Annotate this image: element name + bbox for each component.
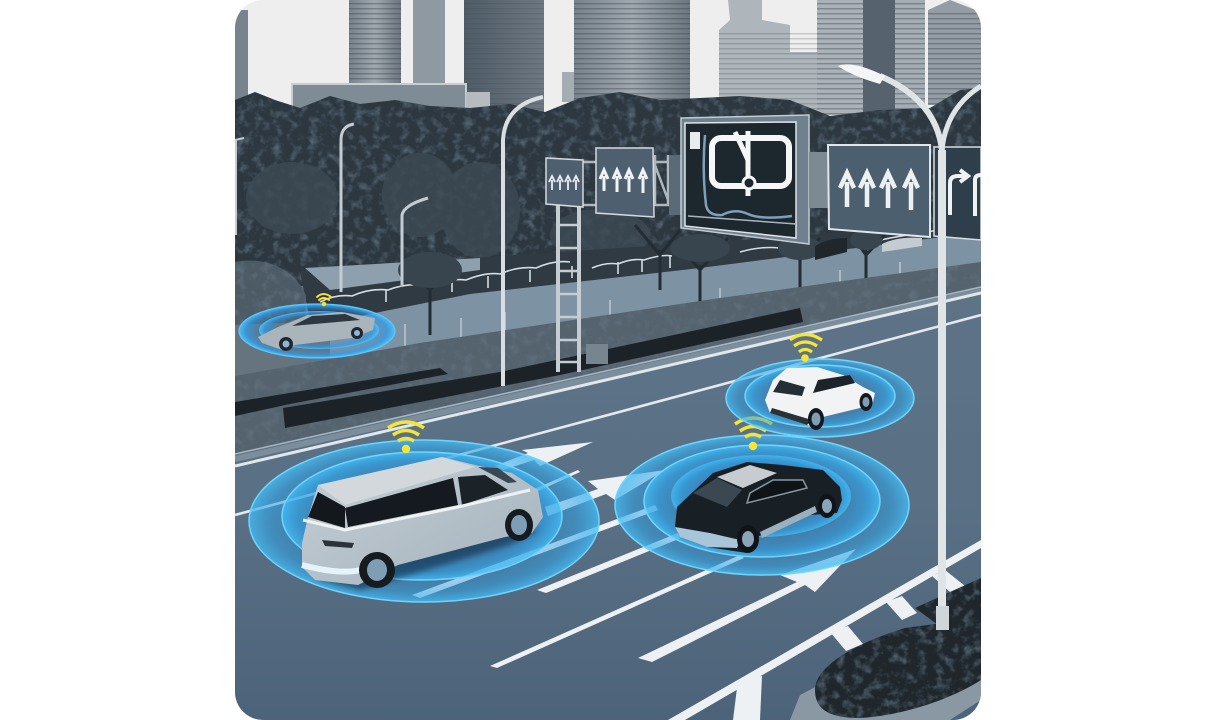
tall street lamp — [838, 64, 981, 630]
wifi icon — [317, 294, 331, 306]
wifi icon — [388, 422, 424, 453]
hedge rows — [235, 308, 803, 428]
large gantry sign: route diagram — [681, 115, 828, 244]
verge — [235, 262, 981, 456]
wifi icon — [790, 334, 822, 362]
sign: four arrows medium — [596, 148, 683, 217]
foreground trees — [246, 153, 650, 261]
wifi icon — [735, 418, 772, 450]
roadside fence posts — [404, 262, 901, 346]
main road surface — [235, 286, 981, 720]
car shadow — [315, 530, 540, 590]
MPV with signal rings — [249, 422, 599, 602]
ground base behind the road — [235, 262, 981, 376]
far car with signal rings — [239, 294, 395, 358]
white SUV with signal rings — [726, 334, 914, 437]
background cars on far road — [815, 238, 922, 260]
illustration: connected cars on a smart highway — [235, 0, 981, 720]
hedge island — [790, 578, 981, 720]
skyline buildings — [235, 0, 981, 118]
photo frame — [235, 0, 981, 720]
roadside young trees — [405, 225, 885, 335]
lane markings and arrows — [412, 442, 981, 720]
car body — [302, 457, 543, 585]
tree line — [235, 88, 981, 300]
sign: four arrows large — [828, 145, 930, 237]
gantry and small sign — [545, 155, 669, 372]
road edge lines — [235, 287, 981, 454]
small street lights — [235, 97, 543, 386]
car body — [675, 462, 842, 553]
taxi with signal rings — [615, 418, 909, 575]
far road — [235, 232, 981, 356]
sky — [242, 0, 974, 116]
fence rails on far road — [320, 230, 940, 302]
sign: turn arrows — [934, 147, 981, 240]
